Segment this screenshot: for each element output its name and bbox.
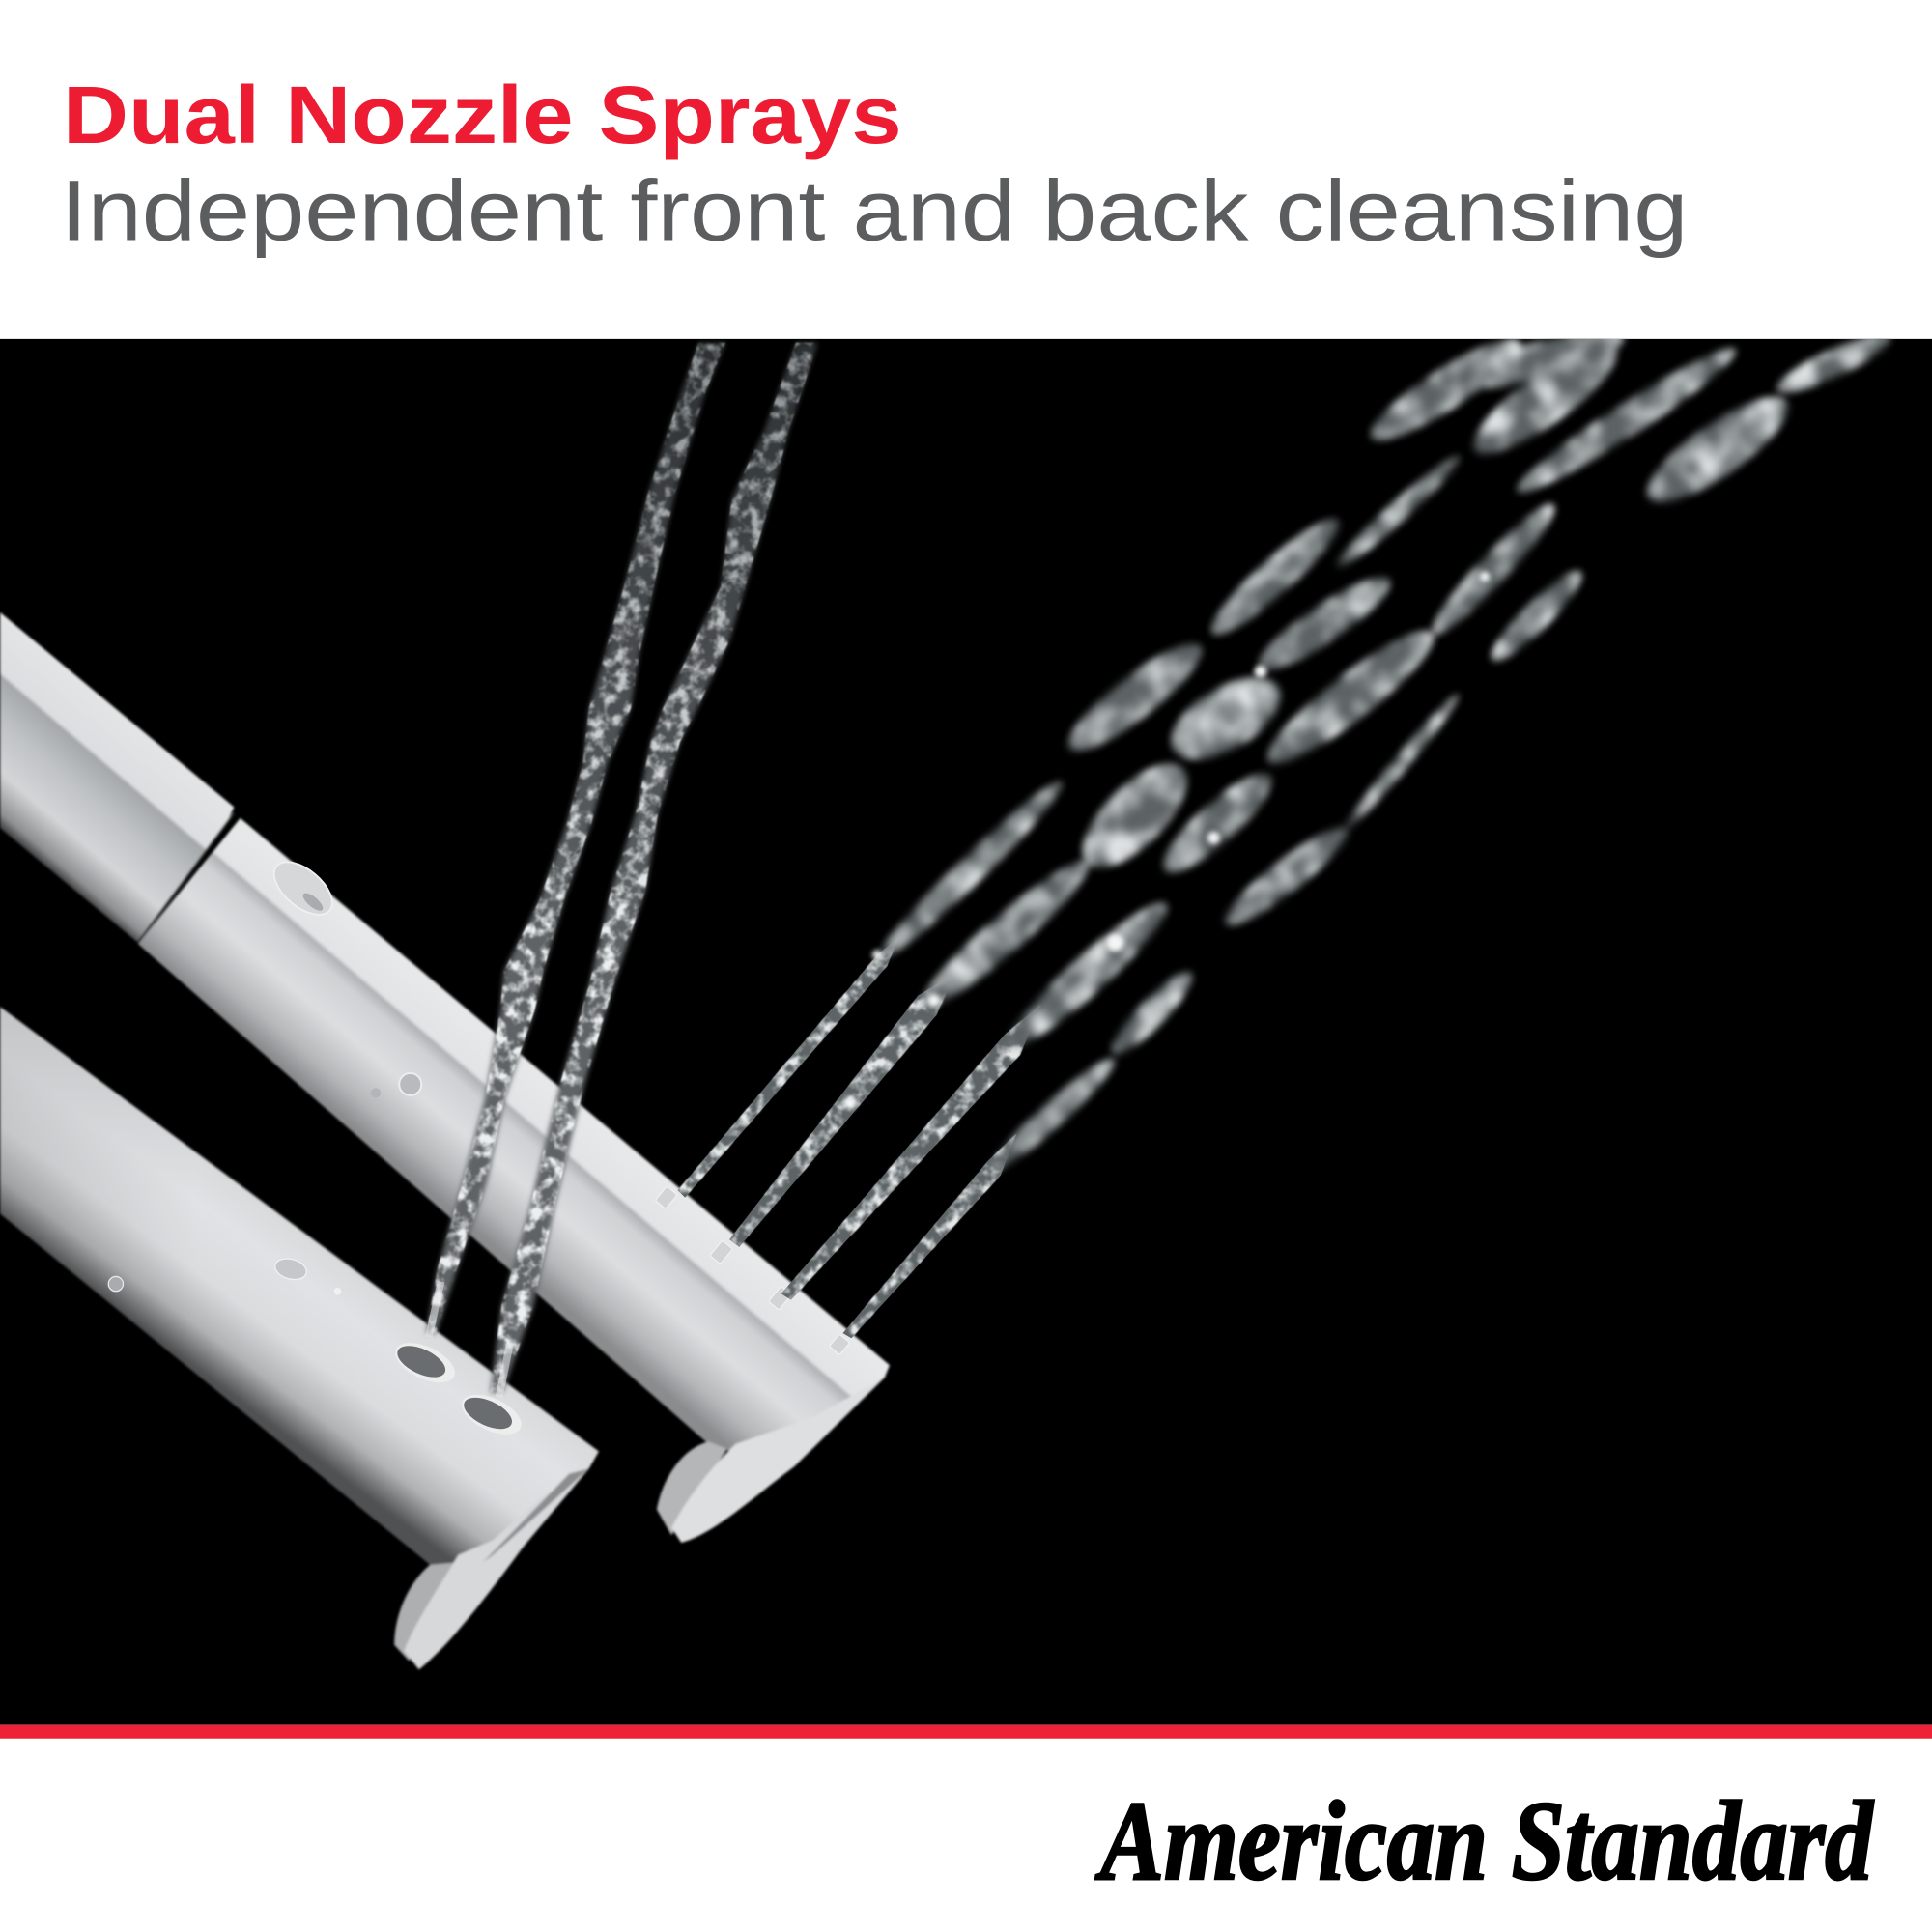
- fan water stream: back spray: [678, 320, 1895, 1338]
- title: Dual Nozzle Sprays: [63, 70, 902, 160]
- nozzle holes on upper wand: [655, 1186, 850, 1355]
- upper nozzle wand: [0, 612, 890, 1543]
- nozzle holes on lower wand: [396, 1343, 522, 1435]
- near-nozzle textured water: [678, 936, 1041, 1338]
- stream bursts base: [872, 321, 1894, 1177]
- droplets on lower wand: [108, 1256, 341, 1295]
- photo panel: dual nozzle wands spraying water: [0, 320, 1932, 1725]
- stream bursts textured highlights: [871, 320, 1895, 1178]
- bright spots: [844, 572, 1490, 1109]
- stream bases near nozzles: [678, 936, 1041, 1338]
- red accent bar: [0, 1725, 1932, 1739]
- lower nozzle wand: [0, 1007, 599, 1669]
- steep water stream: front spray: [426, 343, 818, 1397]
- droplets on upper wand: [265, 852, 421, 1097]
- subtitle: Independent front and back cleansing: [60, 162, 1688, 259]
